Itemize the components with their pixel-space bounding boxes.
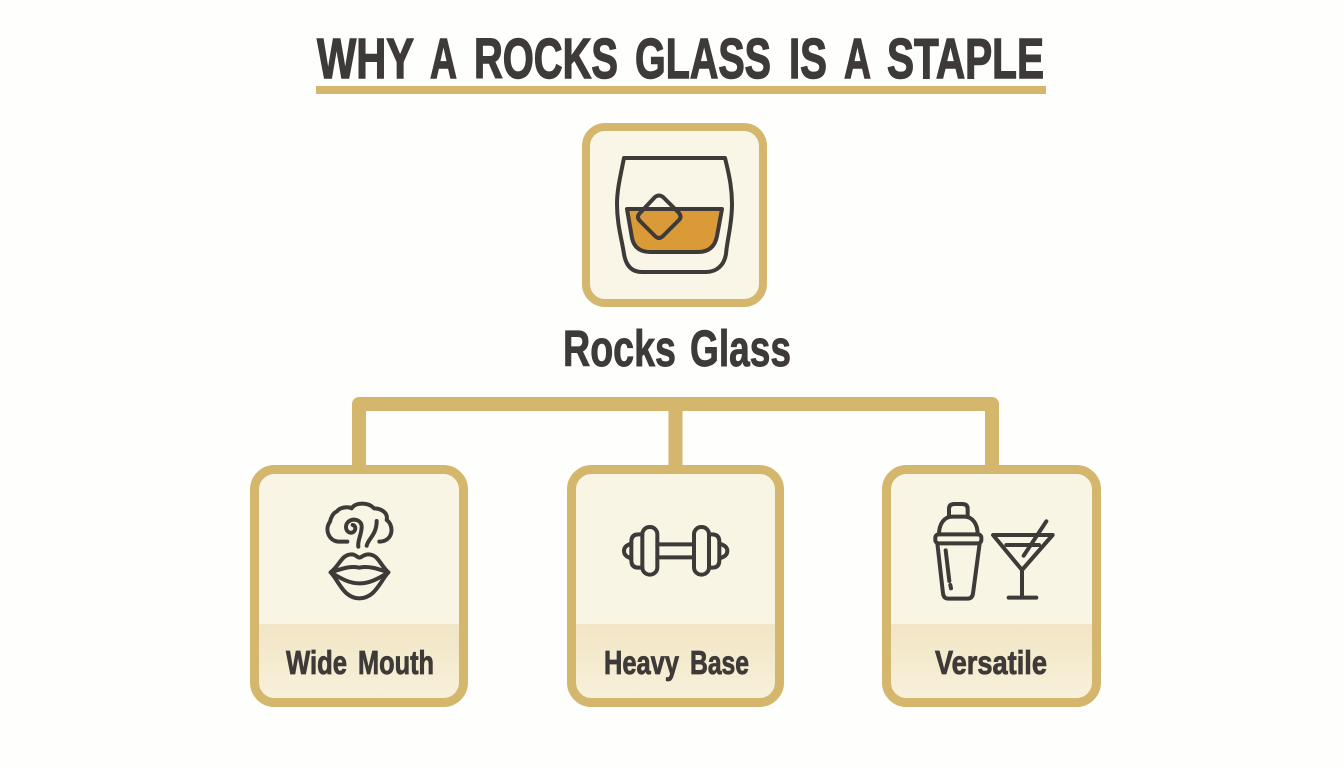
label band bbox=[572, 624, 780, 702]
icon: shaker and martini glass bbox=[935, 504, 1053, 599]
card: wide mouth bbox=[254, 470, 464, 702]
icon: dumbbell bbox=[624, 527, 727, 575]
main label: Glass bbox=[690, 320, 791, 377]
card: versatile bbox=[886, 470, 1096, 702]
title underline bbox=[316, 86, 1046, 94]
main icon: rocks glass bbox=[586, 127, 763, 303]
card border bbox=[572, 470, 780, 702]
title: GLASS bbox=[635, 27, 771, 91]
glass outline bbox=[617, 158, 732, 272]
label band bbox=[254, 624, 464, 702]
icon: aroma and lips bbox=[327, 504, 391, 598]
card border bbox=[254, 470, 464, 702]
tree connector bbox=[359, 404, 992, 465]
label band bbox=[886, 624, 1096, 702]
main label bbox=[563, 320, 791, 377]
card label: Mouth bbox=[358, 644, 434, 681]
title: ROCKS bbox=[474, 27, 618, 91]
title: WHY bbox=[317, 27, 414, 91]
title: STAPLE bbox=[887, 27, 1044, 91]
card background bbox=[572, 470, 780, 702]
card: heavy base bbox=[572, 470, 780, 702]
title: IS bbox=[789, 27, 827, 91]
card border bbox=[886, 470, 1096, 702]
card label bbox=[604, 644, 749, 681]
card label: Base bbox=[690, 644, 749, 681]
card label bbox=[286, 644, 434, 681]
whiskey liquid bbox=[627, 209, 722, 252]
ice cube bbox=[638, 196, 680, 238]
icon tile bbox=[586, 127, 763, 303]
card label: Wide bbox=[286, 644, 347, 681]
card label: Heavy bbox=[604, 644, 679, 681]
main label: Rocks bbox=[563, 320, 676, 377]
card background bbox=[254, 470, 464, 702]
card background bbox=[886, 470, 1096, 702]
title: A bbox=[844, 27, 871, 91]
title bbox=[316, 27, 1046, 94]
card label: Versatile bbox=[935, 644, 1047, 681]
title: A bbox=[430, 27, 457, 91]
